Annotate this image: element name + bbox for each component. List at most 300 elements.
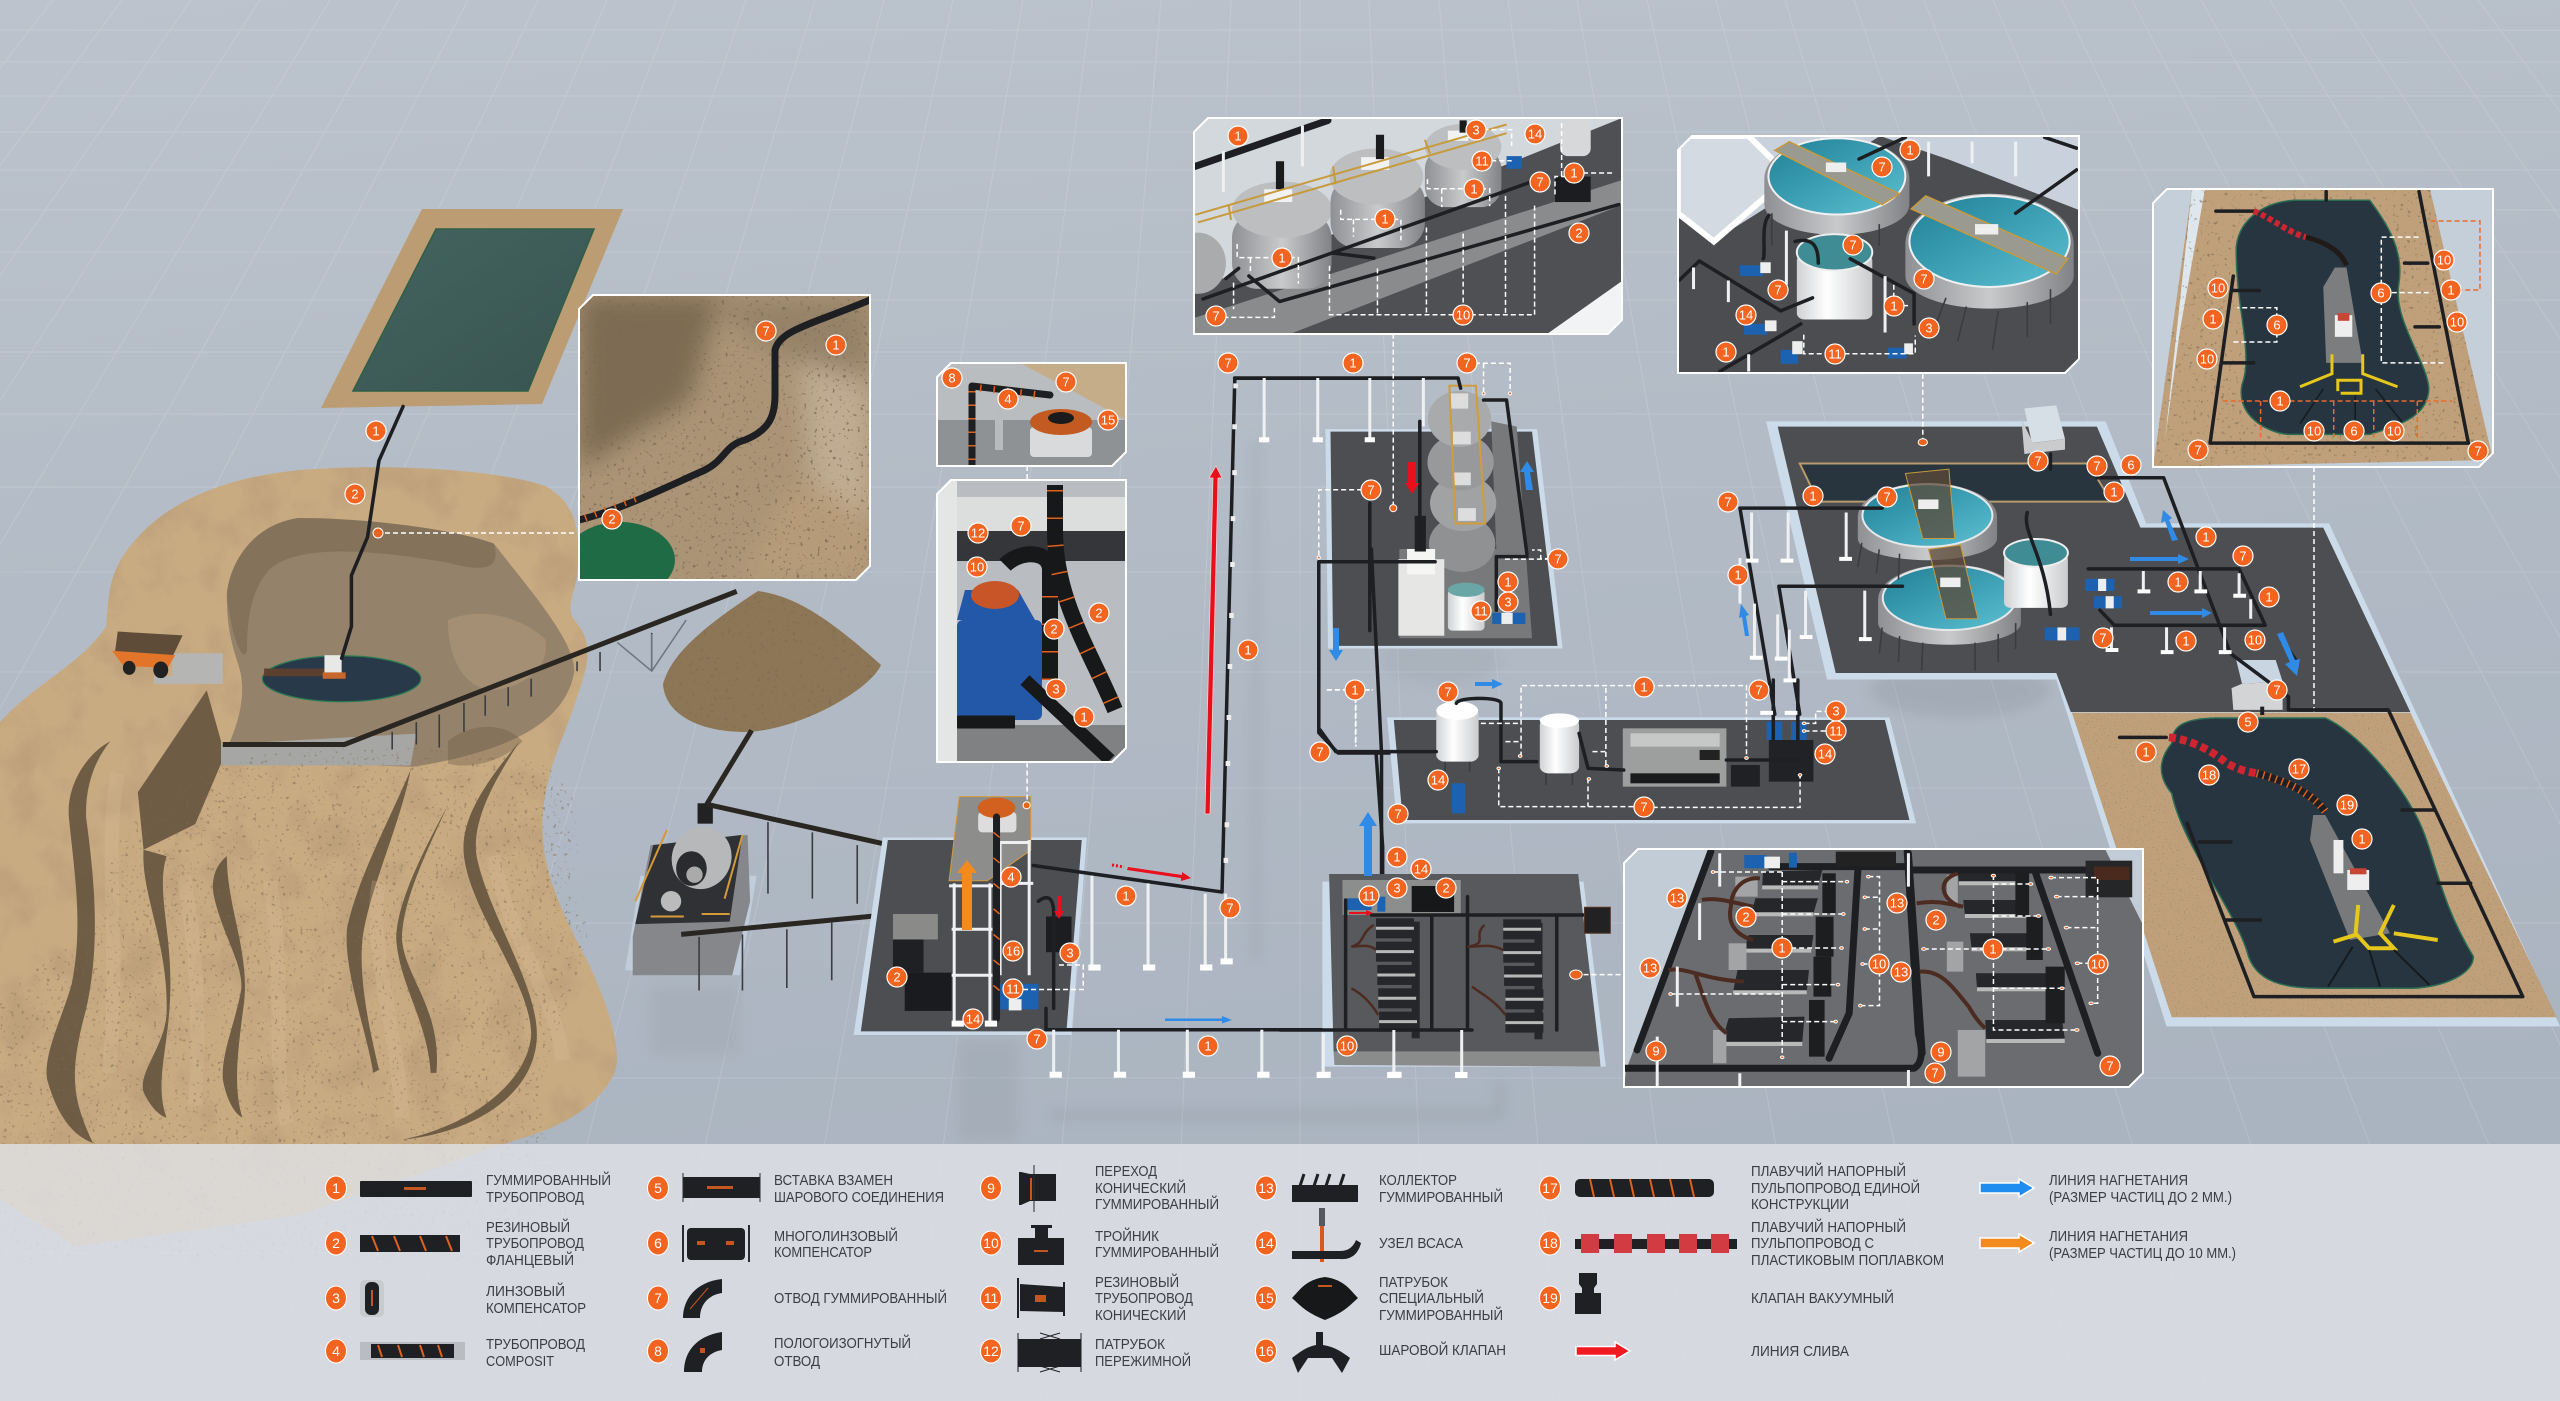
number markers: 7 [1920,272,1928,286]
number markers: 16 [1006,944,1020,958]
clarifier 1 [1858,469,1997,560]
legend item 2: 2 [332,1235,340,1251]
legend item 13: КОЛЛЕКТОР [1379,1173,1457,1189]
upper pit [221,518,574,767]
number markers: 7 [2194,442,2202,458]
number markers: 7 [1444,684,1452,700]
target dot [1390,505,1397,512]
legend item 10: ГУММИРОВАННЫЙ [1095,1243,1219,1261]
legend item 17: 17 [1542,1180,1558,1196]
pump house frame [2262,640,2298,715]
number markers: 1 [2142,744,2150,760]
supports [1264,378,1423,439]
conveyor pile to mill [707,730,752,804]
number markers: 1 [1080,710,1088,724]
legend item 18: ПЛАВУЧИЙ НАПОРНЫЙ [1751,1218,1906,1236]
number markers: 7 [2239,548,2247,564]
conveyor mill to plant [707,804,947,858]
plant 5: clarifier plant [1740,374,2560,1026]
white tank [2004,539,2068,608]
number markers: 7 [762,324,770,338]
bench road highlights [109,773,563,1124]
terrain speckle [0,748,587,1260]
number markers: 10 [2387,424,2401,438]
plant 3 slab [1394,720,1909,820]
number markers: 5 [2244,714,2252,730]
number markers: 6 [2350,424,2358,438]
legend item 8: 8 [654,1343,662,1359]
legend column 6 [1980,1173,2236,1262]
number markers: 2 [1575,226,1583,240]
terrain base [0,467,617,1246]
number markers: 7 [1226,900,1234,916]
legend item 18: ПЛАСТИКОВЫМ ПОПЛАВКОМ [1751,1253,1944,1269]
legend item 10: ТРОЙНИК [1095,1227,1159,1245]
legend column 3 [980,1164,1219,1372]
legend item 2: РЕЗИНОВЫЙ [486,1218,570,1236]
legend item 13: ГУММИРОВАННЫЙ [1379,1188,1503,1206]
flow arrows [957,461,2212,1024]
number markers: 1 [2110,484,2118,500]
number markers: 8 [948,370,956,386]
settling basin [1800,463,2111,502]
number markers: 1 [1393,850,1401,864]
number markers: 13 [1643,960,1657,976]
pumps [2045,579,2122,640]
legend item 14: 14 [1258,1235,1274,1251]
number markers: 7 [2273,682,2281,698]
filter press [1623,728,1760,787]
number markers: 9 [1937,1044,1945,1060]
number markers: 11 [1362,888,1376,904]
pipe loop at pump [1033,378,1420,1030]
blue arrow bottom [1165,1016,1232,1024]
concrete slab [221,734,416,766]
legend item 15 [1256,1275,1503,1324]
second mill [661,891,681,911]
legend item 2: ТРУБОПРОВОД [486,1236,584,1252]
inset rock background [580,296,869,579]
legend blue line [1980,1173,2232,1206]
clarifier legs [1858,543,2016,671]
legend item 6: МНОГОЛИНЗОВЫЙ [774,1227,898,1245]
number markers: 7 [1640,800,1648,814]
clarifier 2 [1878,545,2021,645]
legend item 14 [1256,1208,1463,1262]
number markers: 2 [1742,910,1750,924]
legend item 8: ОТВОД [774,1354,820,1370]
leader 11 [1023,965,1083,989]
inset: hydrocyclone top [937,363,1126,466]
plant 4: collector [1280,874,1623,1075]
number markers: 15 [1101,412,1115,428]
inset: thickeners [1170,118,1622,334]
small tank [1448,583,1485,631]
legend item 17 [1540,1162,1920,1213]
number markers: 7 [2099,630,2107,646]
legend item 15: ГУММИРОВАННЫЙ [1379,1306,1503,1324]
number markers: 1 [2265,590,2273,604]
vat group 1 [1376,918,1420,1038]
number markers: 1 [1809,488,1817,504]
plant 2: thickeners [1235,334,1563,891]
number markers: 2 [351,486,359,502]
vat group 2 [1503,919,1543,1039]
number markers: 7 [2093,458,2101,474]
target dot [1570,970,1582,979]
inset clarifiers border [1678,136,2079,373]
number markers: 10 [2200,352,2214,366]
legend item 6 [648,1225,898,1262]
legend item 11: РЕЗИНОВЫЙ [1095,1273,1179,1291]
number markers: 7 [1033,1032,1041,1046]
crusher [893,914,952,1011]
building top [2021,405,2065,454]
blue flow arrow on tailings [2277,632,2300,676]
number markers: 14 [966,1012,980,1026]
red arrow conveyor [1127,867,1191,881]
number markers: 14 [1818,746,1832,762]
pipe stubs [2120,737,2471,920]
legend item 1: 1 [332,1180,340,1196]
floating plastic float pipe [2169,737,2257,773]
plant 3: filter station [1320,680,1916,977]
number markers: 10 [2091,956,2105,972]
number markers: 1 [1906,142,1914,158]
number markers: 10 [1456,308,1470,322]
terrain mottling [0,468,610,1144]
number markers: 7 [1212,308,1220,324]
number markers: 13 [1890,896,1904,910]
legend item 17: ПЛАВУЧИЙ НАПОРНЫЙ [1751,1162,1906,1180]
pit pond [262,656,421,702]
inset: dredge [2153,189,2493,467]
legend item 4 [326,1337,585,1370]
number markers: 1 [1504,574,1512,590]
pile grain [664,596,874,730]
number markers: 7 [2034,454,2042,468]
central cylinder column [1398,516,1444,636]
plant 1 slab [861,840,1082,1031]
target dot [1023,802,1030,809]
inset thickeners contents [1170,118,1622,334]
legend item 3: КОМПЕНСАТОР [486,1301,586,1317]
number markers: 1 [1890,298,1898,314]
legend item 10 [980,1225,1219,1265]
number markers: 1 [2182,634,2190,648]
legend item 16: ШАРОВОЙ КЛАПАН [1379,1341,1506,1359]
plant 6: tailings pond [2072,640,2557,1017]
inset: pump [937,480,1126,762]
number markers: 11 [1474,604,1488,618]
number markers: 2 [1932,912,1940,928]
number markers: 1 [1244,642,1252,658]
legend item 4: 4 [332,1343,340,1359]
orange arrow [957,860,977,930]
number markers: 1 [2174,574,2182,590]
leader lines [1319,334,1550,746]
number markers: 10 [1340,1038,1354,1054]
dredge shadow legs [2328,947,2430,987]
blue pump [1000,984,1038,1010]
leader to inset [1923,374,2314,718]
pump row [1342,880,1461,915]
number markers: 4 [1007,870,1015,884]
legend item 5: 5 [654,1180,662,1196]
legend item 19: КЛАПАН ВАКУУМНЫЙ [1751,1289,1894,1307]
truck [112,632,183,678]
tailings perimeter pipe [2187,710,2523,997]
number markers: 1 [372,424,380,438]
sump box [1767,722,1813,782]
number markers: 7 [1774,282,1782,298]
legend item 3: 3 [332,1290,340,1306]
open pit terrain [0,406,737,1252]
dredge on pit pond [264,655,346,679]
pond water [353,229,594,391]
legend item 6: 6 [654,1235,662,1251]
number markers: 3 [1504,594,1512,610]
leader to inset [1584,974,1623,976]
inset clarifiers contents [1678,136,2079,373]
number markers: 1 [1778,940,1786,956]
number markers: 14 [1431,772,1445,788]
number markers: 3 [1925,320,1933,336]
source pond [321,209,623,408]
red arrow down plant 1 [1054,896,1064,919]
pipeline from pond [342,406,403,658]
number markers: 19 [2340,798,2354,812]
leader line to inset [1026,466,1028,802]
legend band [0,1144,2560,1401]
ore pile [660,590,885,735]
number markers: 7 [2106,1058,2114,1074]
inset dredge contents [2153,189,2493,467]
number markers: 7 [1883,490,1891,504]
inset collector contents [1624,849,2143,1087]
number markers: 9 [1652,1044,1660,1058]
blue pump [1492,613,1525,624]
plant 1: hydrocyclone plant [854,378,1420,1075]
legend item 4: ТРУБОПРОВОД [486,1337,585,1353]
number markers: 18 [2202,768,2216,782]
number markers: 10 [2450,314,2464,330]
legend item 9: 9 [987,1180,995,1196]
legend item 19: 19 [1542,1290,1558,1306]
legend item 7 [648,1279,947,1318]
number markers: 7 [1367,482,1375,498]
thickener stack [1427,386,1496,572]
number markers: 7 [1536,174,1544,190]
number markers: 10 [2248,632,2262,648]
leader 1 dots [1497,722,1806,780]
mill deck [635,835,742,924]
number markers: 13 [1894,964,1908,980]
number markers: 7 [1463,356,1471,370]
red arrow small dashes [1112,865,1124,867]
number markers: 11 [1006,982,1020,996]
dredge hull [2310,815,2390,940]
number markers: 13 [1670,890,1684,906]
number markers: 7 [1316,744,1324,760]
pipes [1235,378,1527,891]
number markers: 7 [1755,682,1763,698]
pit back wall shadow [227,518,496,654]
legend item 11: КОНИЧЕСКИЙ [1095,1306,1186,1324]
red arrow collector [1349,910,1373,916]
number markers: 1 [1381,212,1389,226]
legend column 1 [326,1171,611,1370]
legend item 13 [1256,1173,1503,1206]
number markers: 10 [1872,956,1886,972]
number markers: 14 [1528,126,1542,142]
tank 2 [1540,713,1579,785]
red arrow tall [1205,466,1222,814]
concrete walkway [1399,421,1532,638]
pipes [1280,897,1592,1030]
legend column 2 [648,1173,947,1372]
number markers: 11 [1829,724,1843,738]
floating composit pipe [2257,773,2325,812]
number markers: 3 [1472,122,1480,138]
blue arrow 1 clarifier [2130,554,2189,564]
inset hydrocyclone contents [937,363,1126,466]
pile body [663,591,881,732]
number markers: 1 [1989,942,1997,956]
number markers: 1 [1122,888,1130,904]
inset pump contents [937,480,1126,762]
legend orange line [1980,1229,2236,1262]
blue arrow filter [1475,679,1503,689]
legend item 9: КОНИЧЕСКИЙ [1095,1179,1186,1197]
pipe bases [952,961,1402,1075]
number markers: 10 [2307,424,2321,438]
number markers [345,120,2488,1083]
legend item 7: 7 [654,1290,662,1306]
number markers: 11 [1828,346,1842,362]
tailings sand [2072,713,2557,1017]
number markers: 11 [1475,154,1489,168]
plant 5 frame [1766,421,2560,1026]
tower decks [949,797,1031,881]
tailings water [2161,718,2473,988]
number markers: 10 [2211,280,2225,296]
legend item 9 [980,1164,1219,1213]
number markers: 7 [1394,806,1402,822]
number markers: 1 [1349,356,1357,370]
support bases [1259,437,1375,442]
mill drum [661,817,742,899]
supports [1740,512,2251,679]
number markers: 1 [1570,166,1578,180]
tank 1 [1436,701,1479,772]
number markers: 12 [971,526,985,540]
dredge house [2334,840,2369,890]
pit rock highlight [448,614,546,690]
legend item 14: УЗЕЛ ВСАСА [1379,1236,1463,1252]
number markers: 2 [1442,880,1450,896]
dredge arms [2334,905,2438,948]
pond sand bank [321,209,623,408]
pipe supports top-bottom [1054,876,1394,1075]
legend item 11 [980,1273,1193,1324]
blue arrow down thickener [1329,628,1343,661]
number markers: 2 [608,512,616,526]
legend item 1: ТРУБОПРОВОД [486,1190,584,1206]
legend item 15: СПЕЦИАЛЬНЫЙ [1379,1289,1484,1307]
target dots [1918,439,1927,446]
legend item 10: 10 [983,1235,999,1251]
number markers: 7 [1554,552,1562,566]
pit dark bottom right [448,727,523,766]
number markers: 3 [1052,682,1060,696]
legend item 5: ШАРОВОГО СОЕДИНЕНИЯ [774,1190,944,1206]
plant 4 front [1334,1052,1601,1067]
number markers: 7 [1931,1066,1939,1080]
number markers: 2 [893,970,901,984]
legend item 5: ВСТАВКА ВЗАМЕН [774,1173,893,1189]
feed pump [1452,783,1465,813]
legend orange line: ЛИНИЯ НАГНЕТАНИЯ [2049,1229,2188,1245]
legend item 12 [980,1333,1191,1372]
conveyor supports [392,633,652,750]
number markers: 7 [1878,160,1886,174]
inset collector border [1624,849,2143,1087]
plant 1 frame [854,837,1087,1035]
blue arrow feed clarifier [1739,604,1749,636]
legend drain line: ЛИНИЯ СЛИВА [1751,1344,1849,1360]
number markers: 1 [1734,568,1742,582]
number markers: 1 [1640,680,1648,694]
red arrow thickener [1405,462,1419,494]
number markers: 1 [2276,394,2284,408]
mill rails [635,830,742,917]
number markers: 1 [2202,530,2210,544]
legend item 11: 11 [984,1290,998,1306]
hose [993,817,1000,1019]
number markers: 7 [1062,374,1070,390]
tower frames [949,840,1033,1024]
legend item 9: ПЕРЕХОД [1095,1164,1157,1180]
number markers: 7 [1724,494,1732,510]
number markers: 7 [1849,238,1857,252]
legend item 3: ЛИНЗОВЫЙ [486,1282,565,1300]
legend item 16: 16 [1258,1343,1274,1359]
plant 2 slab [1331,432,1558,646]
truck platform [154,653,223,684]
legend item 2: ФЛАНЦЕВЫЙ [486,1251,574,1269]
number markers: 7 [1017,518,1025,534]
number markers: 7 [2474,444,2482,458]
conveyor truss [617,620,686,671]
number markers: 6 [2127,458,2135,472]
number markers: 3 [1066,946,1074,960]
number markers: 7 [1224,356,1232,370]
inset dredge border [2153,189,2493,467]
inset hydrocyclone border [937,363,1126,466]
inset: rock pipeline [373,295,870,598]
lower building [2232,660,2283,710]
number markers: 3 [1832,704,1840,718]
mill concrete base [633,835,750,975]
number markers: 1 [2447,282,2455,298]
grinding mill [625,730,947,991]
blue arrow up tall [1359,812,1377,876]
target dot [373,528,383,538]
hose stripes [993,832,1000,991]
blue arrow thickener up [1520,461,1534,490]
pipes [1320,680,1798,977]
